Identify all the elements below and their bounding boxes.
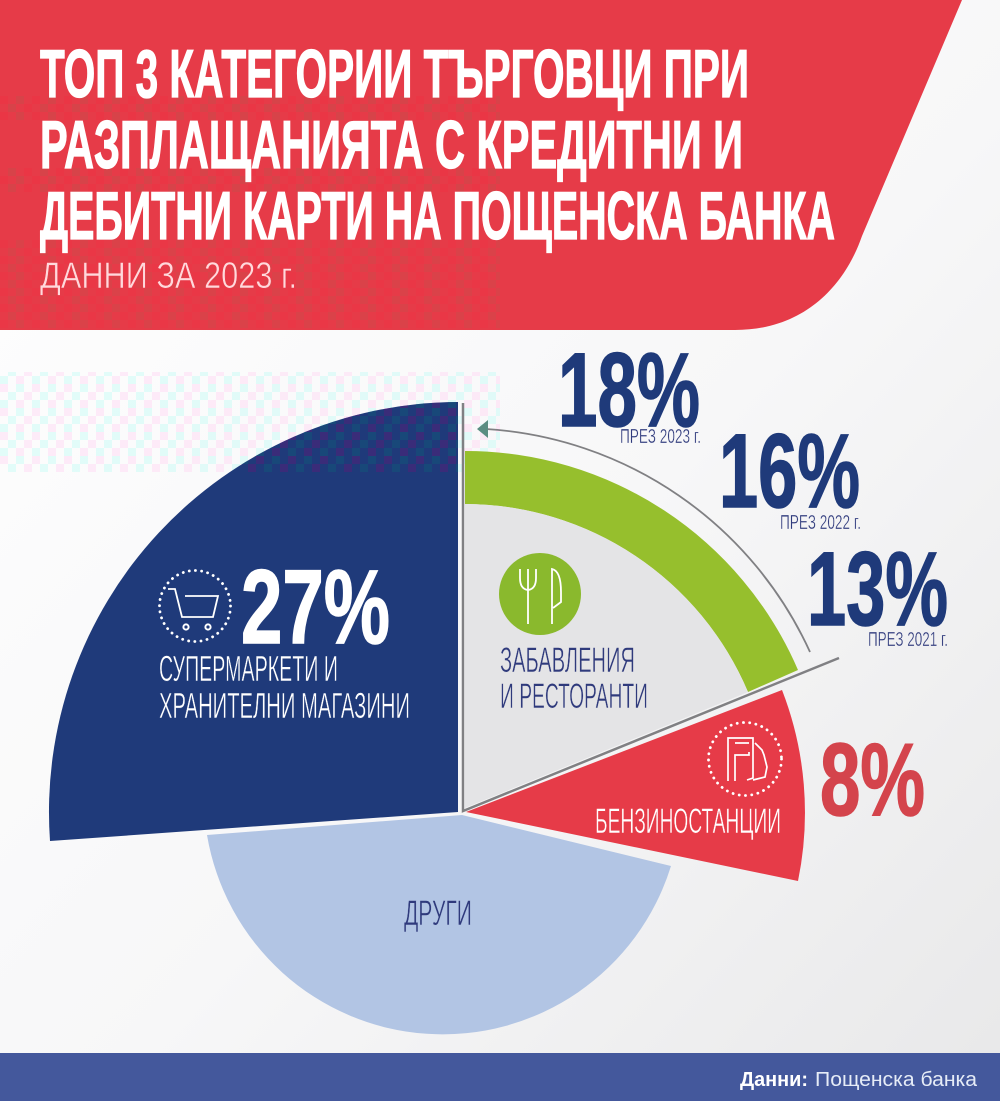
pie slice: entertainment and restaurants (465, 451, 798, 808)
value: 27%: 27% (241, 549, 390, 666)
green ring 2023 (465, 451, 798, 692)
pie slice: others (207, 815, 671, 1034)
value: 18% in 2023: ПРЕЗ 2023 г. (620, 426, 701, 448)
label: entertainment: ЗАБАВЛЕНИЯ (500, 641, 635, 680)
grey sector (465, 504, 748, 808)
value: 16% in 2022: 16% (719, 413, 860, 530)
label: supermarkets (159, 648, 410, 726)
footer band (0, 1053, 1000, 1101)
value: 13% in 2021: ПРЕЗ 2021 г. (868, 629, 948, 651)
title (40, 36, 835, 254)
pie slice: fuel stations (466, 690, 805, 881)
subtitle: ДАННИ ЗА 2023 г. (40, 255, 297, 296)
source credit: Пощенска банка (815, 1069, 978, 1091)
icon: cutlery (499, 553, 581, 635)
icon: shopping cart (160, 570, 230, 642)
label: entertainment: И РЕСТОРАНТИ (500, 677, 648, 716)
value: 8%: 8% (820, 722, 925, 837)
label: fuel stations: БЕНЗИНОСТАНЦИИ (595, 802, 781, 841)
divider lines (463, 403, 839, 811)
value: 16% in 2022: ПРЕЗ 2022 г. (780, 512, 861, 534)
arrow: trend 2021 to 2023 (477, 420, 810, 652)
pie slice: supermarkets (49, 400, 460, 841)
label: supermarkets: СУПЕРМАРКЕТИ И (159, 648, 338, 689)
label: entertainment (500, 641, 648, 716)
source credit: Данни: (740, 1069, 808, 1091)
label: others: ДРУГИ (404, 894, 472, 933)
value: 18% in 2023 (558, 332, 701, 449)
icon: fuel pump (708, 722, 782, 796)
value: 16% in 2022 (719, 413, 861, 534)
header banner (0, 0, 962, 330)
source credit (740, 1069, 978, 1091)
value: 18% in 2023: 18% (558, 332, 700, 449)
label: supermarkets: ХРАНИТЕЛНИ МАГАЗИНИ (159, 685, 410, 726)
